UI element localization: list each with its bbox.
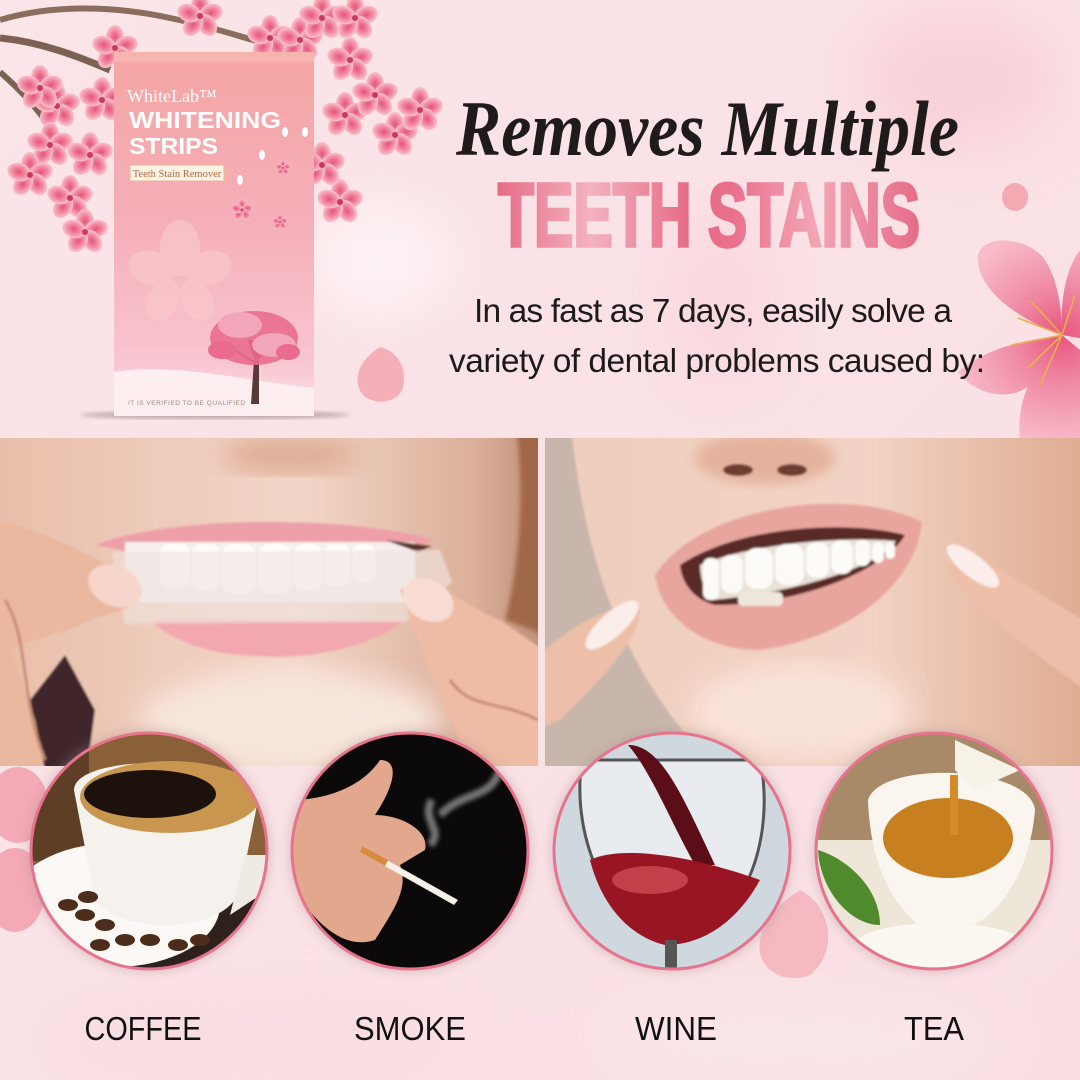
loose petal top right bbox=[1002, 183, 1028, 211]
lips upper bbox=[95, 522, 435, 552]
circle: smoke bbox=[290, 731, 530, 971]
nose shadow bbox=[220, 437, 360, 473]
teeth bbox=[700, 540, 896, 600]
hand right bbox=[1016, 582, 1080, 686]
right hand bbox=[400, 588, 538, 766]
product label: Teeth Stain Remover bbox=[133, 169, 222, 180]
label: coffee: COFFEE bbox=[84, 1010, 202, 1047]
title script line: Removes Multiple bbox=[455, 85, 959, 172]
circle: tea bbox=[814, 731, 1055, 971]
subtitle text bbox=[449, 293, 985, 380]
label: tea: TEA bbox=[904, 1010, 964, 1047]
chin highlight bbox=[140, 670, 440, 770]
label: wine: WINE bbox=[635, 1010, 717, 1047]
hand left bbox=[545, 610, 640, 728]
loose petal bbox=[357, 347, 404, 402]
labels bbox=[84, 1010, 964, 1047]
lower blossom left bbox=[0, 767, 48, 932]
product name: STRIPS bbox=[129, 133, 218, 159]
photo: bright smile bbox=[545, 438, 1080, 766]
left hand bbox=[0, 521, 128, 766]
teeth bbox=[125, 542, 415, 602]
faint flower on box bbox=[124, 220, 236, 327]
brand name: WhiteLab™ bbox=[127, 86, 217, 106]
box footer text: IT IS VERIFIED TO BE QUALIFIED bbox=[128, 400, 246, 407]
product label bbox=[130, 165, 224, 181]
circle: wine bbox=[552, 731, 793, 971]
whitening strip bbox=[112, 550, 452, 624]
box shadow bbox=[80, 411, 350, 419]
hair bbox=[503, 438, 538, 635]
nose bbox=[695, 432, 835, 484]
label: smoke: SMOKE bbox=[354, 1010, 466, 1047]
mouth bbox=[680, 527, 905, 605]
subtitle text: In as fast as 7 days, easily solve a bbox=[474, 293, 952, 330]
falling petals bbox=[229, 127, 308, 230]
product name bbox=[129, 107, 281, 159]
box top flap bbox=[114, 52, 314, 62]
subtitle text: variety of dental problems caused by: bbox=[449, 343, 985, 380]
lower petal bbox=[759, 890, 828, 978]
product box bbox=[80, 52, 350, 419]
box body bbox=[114, 52, 314, 416]
snowy ground on box bbox=[114, 369, 314, 416]
circle: coffee bbox=[10, 731, 269, 971]
tree illustration bbox=[208, 311, 300, 404]
photo: strip applied to teeth bbox=[0, 438, 538, 766]
product name: WHITENING bbox=[129, 107, 281, 133]
lower lip bbox=[150, 620, 405, 657]
lips bbox=[655, 504, 922, 650]
chin highlight bbox=[690, 665, 910, 755]
large blossom right bbox=[958, 240, 1080, 438]
cherry blossom branch bbox=[0, 0, 445, 256]
